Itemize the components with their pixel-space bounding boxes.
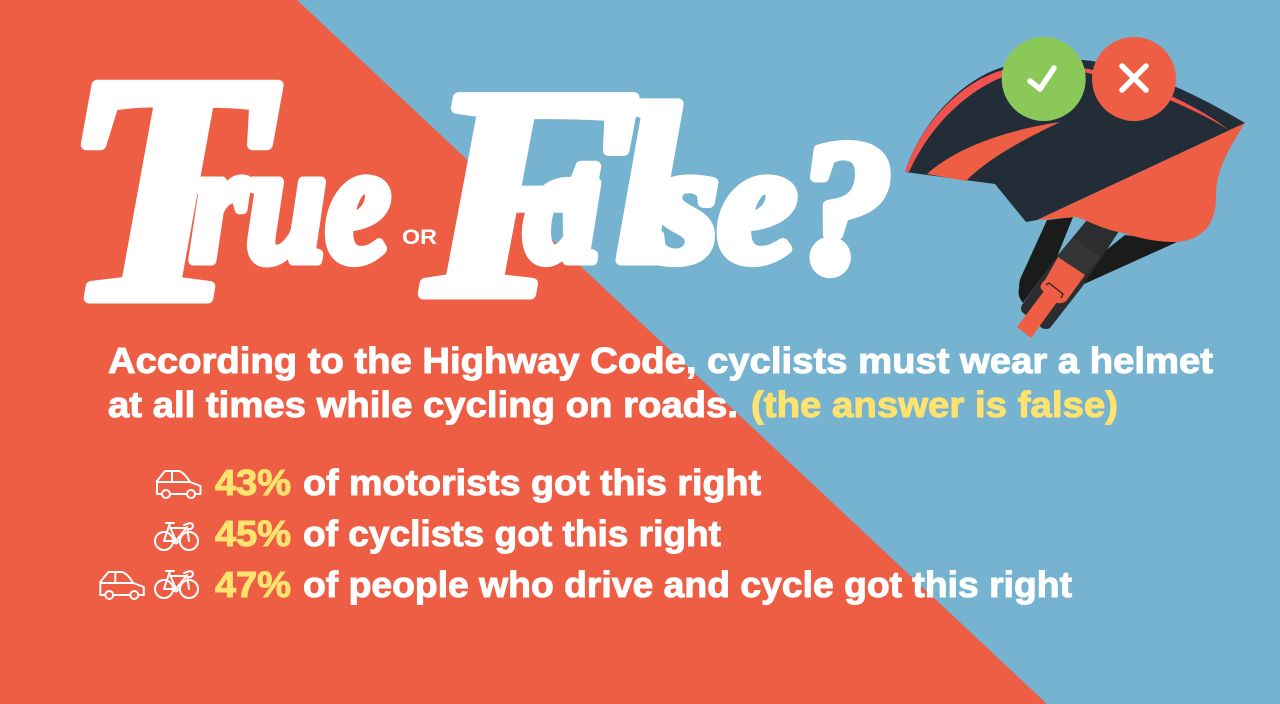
illustration: cycle helmet (905, 59, 1245, 338)
statement line 2: (the answer is false) (751, 384, 1118, 425)
icon: car (157, 471, 200, 498)
icon: red cross (1092, 37, 1176, 121)
icon: green tick (1002, 37, 1086, 121)
stat row: motorists (157, 462, 761, 503)
title word: True: rue (190, 109, 390, 297)
stat row: cyclists (155, 513, 721, 554)
stat row: drive and cycle (100, 564, 1072, 605)
title word: False?: F (419, 27, 639, 359)
helmet straps (1018, 217, 1177, 329)
stat text: drive and cycle: of people who drive and cycle got this right (303, 564, 1072, 605)
strap buckle (1017, 257, 1085, 338)
stat text: cyclists: 45% (215, 513, 291, 554)
title word: True: T (62, 9, 282, 369)
icon: car (100, 572, 144, 599)
statement text (108, 340, 1213, 425)
background: blue diagonal panel (297, 0, 1280, 704)
title word: or: OR (402, 226, 437, 249)
stat text: motorists: 43% (215, 462, 291, 503)
helmet shell (905, 59, 1245, 222)
helmet crescent (927, 122, 1060, 181)
title word: False?: ? (798, 102, 892, 311)
statement line 2: at all times while cycling on roads. (108, 384, 738, 425)
stat text: cyclists: of cyclists got this right (303, 513, 721, 554)
stat text: motorists: of motorists got this right (303, 462, 761, 503)
helmet rear panel (1037, 123, 1245, 242)
helmet red stripe (905, 68, 1229, 172)
title: True or False? (62, 9, 892, 369)
stat text: drive and cycle: 47% (215, 564, 291, 605)
icon: bicycle (155, 571, 198, 598)
title word: False?: l (616, 59, 679, 309)
icon: bicycle (155, 523, 198, 550)
title word: False?: a (525, 113, 600, 296)
statement line 1: According to the Highway Code, cyclists must wear a helmet (108, 340, 1213, 381)
title word: False?: se (649, 109, 796, 297)
